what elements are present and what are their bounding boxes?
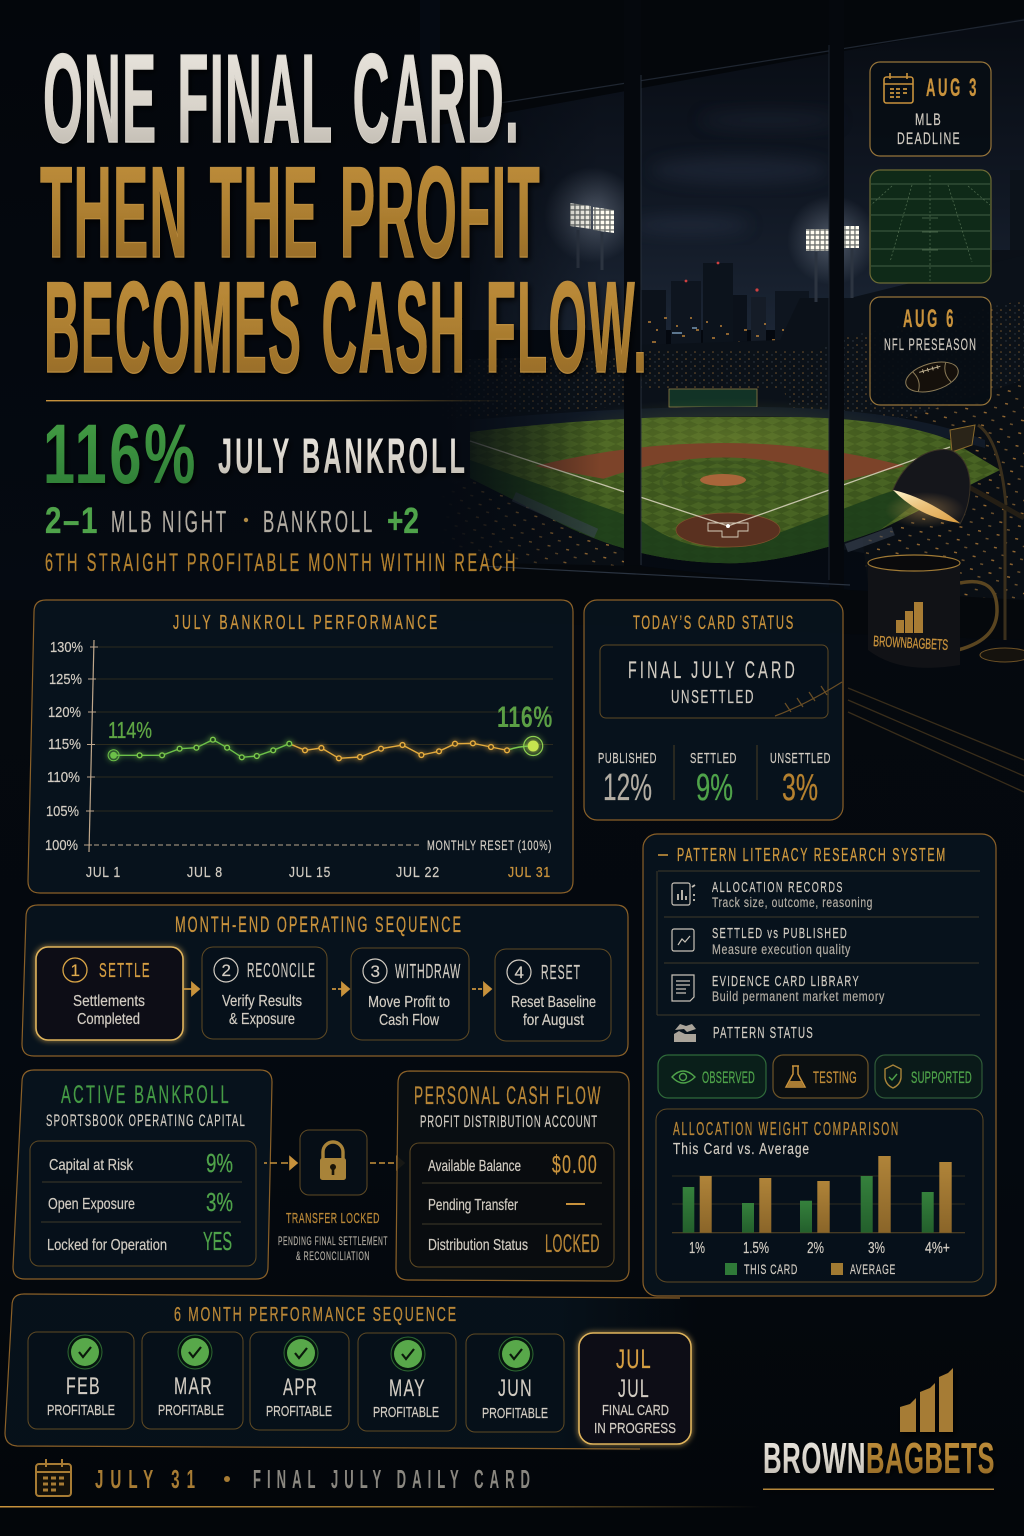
stat: settled bbox=[690, 750, 737, 809]
row: allocation records: ALLOCATION RECORDS bbox=[712, 879, 844, 896]
month: jul in progress: JUL bbox=[616, 1344, 652, 1374]
footer rule bbox=[0, 1506, 760, 1508]
mlb night summary: 2–1 bbox=[45, 500, 99, 541]
transfer lock: & RECONCILIATION bbox=[296, 1249, 370, 1263]
panel: pattern literacy research system bbox=[643, 834, 996, 1296]
transfer lock: PENDING FINAL SETTLEMENT bbox=[278, 1234, 388, 1248]
bankroll table: 9% bbox=[206, 1148, 233, 1178]
axis labels: 120% bbox=[48, 704, 81, 721]
month: apr: APR bbox=[283, 1374, 318, 1401]
step 1: settle: 1 bbox=[70, 961, 80, 980]
foul lines bbox=[470, 441, 950, 526]
status box bbox=[600, 645, 828, 718]
step 4: reset: Reset Baseline bbox=[511, 994, 596, 1011]
month: jun: JUN bbox=[498, 1375, 533, 1402]
month: jun bbox=[466, 1334, 564, 1432]
stat: unsettled: UNSETTLED bbox=[770, 750, 831, 767]
panel: active bankroll bbox=[13, 1070, 272, 1279]
cash flow table: LOCKED bbox=[545, 1230, 600, 1258]
month: mar: MAR bbox=[174, 1373, 213, 1400]
row: allocation records: Track size, outcome, reasoning bbox=[712, 895, 873, 910]
step 4: reset: RESET bbox=[541, 962, 581, 984]
footer date line: FINAL JULY DAILY CARD bbox=[253, 1464, 536, 1494]
axis labels: JUL 31 bbox=[508, 864, 551, 881]
date card: aug 6: AUG 6 bbox=[903, 305, 956, 333]
step 3: withdraw: WITHDRAW bbox=[395, 961, 461, 983]
allocation weight chart: 1% bbox=[689, 1240, 705, 1257]
panel: month-end operating sequence bbox=[22, 905, 628, 1056]
cash flow table: $0.00 bbox=[552, 1151, 598, 1179]
bars: 2% bbox=[800, 1181, 830, 1233]
cash flow table: Pending Transfer bbox=[428, 1197, 518, 1214]
date card: aug 3 bbox=[870, 62, 991, 156]
row: settled vs published bbox=[672, 925, 851, 957]
footer date line bbox=[36, 1459, 536, 1496]
arrow bbox=[332, 983, 349, 995]
month: may: MAY bbox=[389, 1375, 426, 1402]
allocation weight chart bbox=[656, 1109, 983, 1282]
stat: unsettled: 3% bbox=[782, 767, 818, 809]
allocation weight chart: 3% bbox=[868, 1240, 885, 1257]
icon: rising bars bbox=[900, 1368, 953, 1432]
panel: today's card status bbox=[584, 600, 843, 820]
date card: aug 6 bbox=[870, 297, 991, 405]
bankroll stat: 116% bbox=[43, 407, 198, 501]
headline bbox=[40, 28, 648, 400]
arrow: bankroll to lock bbox=[264, 1157, 297, 1169]
panel: month-end operating sequence: MONTH-END OPERATING SEQUENCE bbox=[175, 912, 463, 937]
city skyline bbox=[640, 170, 1024, 353]
step 1: settle: Settlements bbox=[73, 993, 145, 1010]
row: evidence card library bbox=[672, 973, 885, 1004]
mlb night summary: MLB NIGHT bbox=[111, 504, 229, 539]
step 4: reset bbox=[495, 949, 611, 1041]
allocation weight chart: 1.5% bbox=[743, 1240, 769, 1257]
month: mar bbox=[142, 1332, 243, 1429]
bankroll table: YES bbox=[203, 1226, 232, 1256]
step 1: settle bbox=[36, 947, 183, 1040]
transfer lock: TRANSFER LOCKED bbox=[286, 1210, 380, 1227]
cash flow table: Distribution Status bbox=[428, 1237, 528, 1254]
field bbox=[470, 417, 1000, 563]
status box: FINAL JULY CARD bbox=[628, 657, 798, 684]
step 2: reconcile bbox=[202, 947, 327, 1039]
stat: published: 12% bbox=[603, 767, 652, 809]
stat: published bbox=[598, 750, 657, 809]
arrow bbox=[472, 983, 491, 995]
arrow bbox=[184, 983, 199, 995]
chip: supported: SUPPORTED bbox=[911, 1068, 972, 1087]
icon: calendar bbox=[884, 73, 913, 103]
stat: settled: SETTLED bbox=[690, 750, 737, 767]
axis labels bbox=[45, 639, 551, 881]
legend bbox=[725, 1262, 896, 1277]
month: jul in progress bbox=[579, 1333, 691, 1444]
left fade into background bbox=[420, 0, 600, 600]
bankroll stat bbox=[43, 407, 468, 501]
allocation weight chart: This Card vs. Average bbox=[673, 1141, 810, 1158]
month: jul in progress: FINAL CARD bbox=[602, 1402, 669, 1419]
start value: 114% bbox=[108, 717, 152, 743]
branded mug bbox=[868, 555, 997, 668]
infield grass bbox=[600, 458, 845, 524]
stat: published: PUBLISHED bbox=[598, 750, 657, 767]
pattern status: PATTERN STATUS bbox=[713, 1025, 814, 1042]
panel: personal cash flow: PERSONAL CASH FLOW bbox=[414, 1082, 602, 1110]
monthly reset line bbox=[94, 844, 420, 846]
bankroll table: Capital at Risk bbox=[49, 1157, 134, 1174]
infield dirt bbox=[535, 443, 905, 482]
date card: aug 3: MLB bbox=[915, 110, 942, 129]
night sky bbox=[470, 15, 1024, 330]
row: allocation records bbox=[672, 879, 873, 910]
date card: aug 3: DEADLINE bbox=[897, 129, 961, 148]
window frame bbox=[440, 0, 1024, 640]
panel: 6 month performance sequence bbox=[5, 1294, 700, 1450]
panel: personal cash flow bbox=[396, 1071, 629, 1281]
pattern status bbox=[674, 1024, 814, 1042]
bankroll table: Locked for Operation bbox=[47, 1237, 167, 1254]
bars: 4%+ bbox=[922, 1162, 952, 1233]
icon: padlock bbox=[320, 1142, 346, 1180]
step 2: reconcile: Verify Results bbox=[222, 993, 302, 1010]
legend: THIS CARD bbox=[744, 1262, 798, 1277]
chip: supported bbox=[875, 1055, 982, 1098]
desk bbox=[0, 600, 1024, 1000]
row: evidence card library: EVIDENCE CARD LIBRARY bbox=[712, 973, 860, 990]
month: jul in progress: JUL bbox=[618, 1375, 650, 1403]
month: jun: PROFITABLE bbox=[482, 1405, 548, 1422]
panel: july bankroll performance bbox=[28, 600, 573, 893]
panel: active bankroll: SPORTSBOOK OPERATING CAPITAL bbox=[46, 1112, 246, 1130]
pitcher's mound and home plate bbox=[700, 474, 746, 486]
panel: active bankroll: ACTIVE BANKROLL bbox=[61, 1081, 231, 1109]
outfield wall bbox=[669, 389, 757, 407]
icon: calendar bbox=[36, 1459, 71, 1496]
step 4: reset: 4 bbox=[514, 963, 524, 982]
month: feb: PROFITABLE bbox=[47, 1402, 115, 1419]
step 2: reconcile: RECONCILE bbox=[247, 960, 316, 982]
line chart bbox=[45, 639, 553, 881]
axis labels: 115% bbox=[48, 736, 81, 753]
stadium window scene bbox=[0, 0, 1024, 1000]
brand logo: BROWN bbox=[763, 1434, 866, 1483]
month: may: PROFITABLE bbox=[373, 1404, 439, 1421]
arrow: lock to cash flow bbox=[370, 1157, 404, 1169]
mlb night summary: BANKROLL bbox=[263, 504, 375, 539]
status box: UNSETTLED bbox=[671, 687, 755, 707]
axis labels: 130% bbox=[50, 639, 83, 656]
axis labels: 125% bbox=[49, 671, 82, 688]
mlb night summary: +2 bbox=[387, 500, 419, 541]
transfer lock bbox=[264, 1130, 404, 1263]
branded mug: BROWNBAGBETS bbox=[873, 633, 949, 654]
step 3: withdraw: Move Profit to bbox=[368, 994, 450, 1011]
step 2: reconcile: 2 bbox=[222, 961, 231, 980]
stat: unsettled bbox=[770, 750, 831, 809]
step 2: reconcile: & Exposure bbox=[229, 1011, 295, 1028]
bars: 1% bbox=[683, 1176, 712, 1233]
panel: personal cash flow: PROFIT DISTRIBUTION ACCOUNT bbox=[420, 1113, 598, 1131]
allocation weight chart: 4%+ bbox=[925, 1240, 950, 1257]
axis labels: JUL 8 bbox=[187, 864, 223, 881]
football field card bbox=[870, 170, 991, 283]
step 1: settle: SETTLE bbox=[99, 960, 151, 982]
month: mar: PROFITABLE bbox=[158, 1402, 224, 1419]
allocation weight chart: 2% bbox=[807, 1240, 824, 1257]
end value: 116% bbox=[497, 701, 553, 734]
step 3: withdraw: Cash Flow bbox=[379, 1012, 439, 1029]
chip: observed: OBSERVED bbox=[702, 1068, 755, 1087]
bankroll stat: JULY BANKROLL bbox=[218, 428, 468, 484]
headline rule bbox=[46, 400, 506, 401]
brand logo bbox=[763, 1368, 995, 1490]
axis labels: JUL 15 bbox=[289, 864, 331, 881]
step 3: withdraw bbox=[351, 948, 469, 1040]
chip: observed bbox=[658, 1055, 766, 1098]
legend: AVERAGE bbox=[850, 1262, 896, 1277]
axis labels: 110% bbox=[47, 769, 80, 786]
axis labels: JUL 1 bbox=[86, 864, 121, 881]
line chart: MONTHLY RESET (100%) bbox=[427, 838, 552, 853]
row: evidence card library: Build permanent market memory bbox=[712, 989, 885, 1004]
axis labels: 105% bbox=[46, 803, 79, 820]
panel: today's card status: TODAY’S CARD STATUS bbox=[633, 613, 795, 634]
icon: football bbox=[902, 357, 962, 397]
chip: testing: TESTING bbox=[813, 1068, 857, 1087]
bankroll table bbox=[30, 1141, 256, 1266]
bars: 1.5% bbox=[742, 1178, 771, 1233]
stat: settled: 9% bbox=[696, 767, 733, 809]
row: settled vs published: SETTLED vs PUBLISHED bbox=[712, 925, 848, 942]
step 1: settle: Completed bbox=[77, 1011, 140, 1028]
cash flow table: Available Balance bbox=[428, 1158, 521, 1175]
footer date line: JULY 31 bbox=[95, 1464, 202, 1494]
panel: 6 month performance sequence: 6 MONTH PERFORMANCE SEQUENCE bbox=[174, 1304, 458, 1326]
month: may bbox=[358, 1333, 456, 1431]
month: apr bbox=[250, 1332, 349, 1430]
chip: testing bbox=[773, 1055, 868, 1098]
bankroll table: Open Exposure bbox=[48, 1196, 135, 1213]
month: jul in progress: IN PROGRESS bbox=[594, 1420, 676, 1437]
cash flow table bbox=[410, 1143, 614, 1267]
step 3: withdraw: 3 bbox=[370, 962, 380, 981]
streak line: 6TH STRAIGHT PROFITABLE MONTH WITHIN REACH bbox=[45, 549, 518, 577]
axis labels: JUL 22 bbox=[396, 864, 440, 881]
row: settled vs published: Measure execution quality bbox=[712, 942, 851, 957]
performance line bbox=[108, 736, 543, 761]
bankroll table: 3% bbox=[206, 1187, 233, 1217]
baseball stitches bbox=[775, 682, 842, 716]
month: apr: PROFITABLE bbox=[266, 1403, 332, 1420]
bars: 3% bbox=[861, 1156, 891, 1233]
stadium lights bbox=[544, 167, 877, 302]
month: feb: FEB bbox=[66, 1373, 101, 1400]
month: feb bbox=[28, 1332, 134, 1429]
upper stands bbox=[430, 255, 1024, 580]
desk lamp bbox=[885, 425, 1024, 662]
axis labels: 100% bbox=[45, 837, 78, 854]
step 4: reset: for August bbox=[523, 1012, 584, 1029]
mlb night summary bbox=[45, 500, 419, 541]
chart title: JULY BANKROLL PERFORMANCE bbox=[173, 612, 440, 634]
